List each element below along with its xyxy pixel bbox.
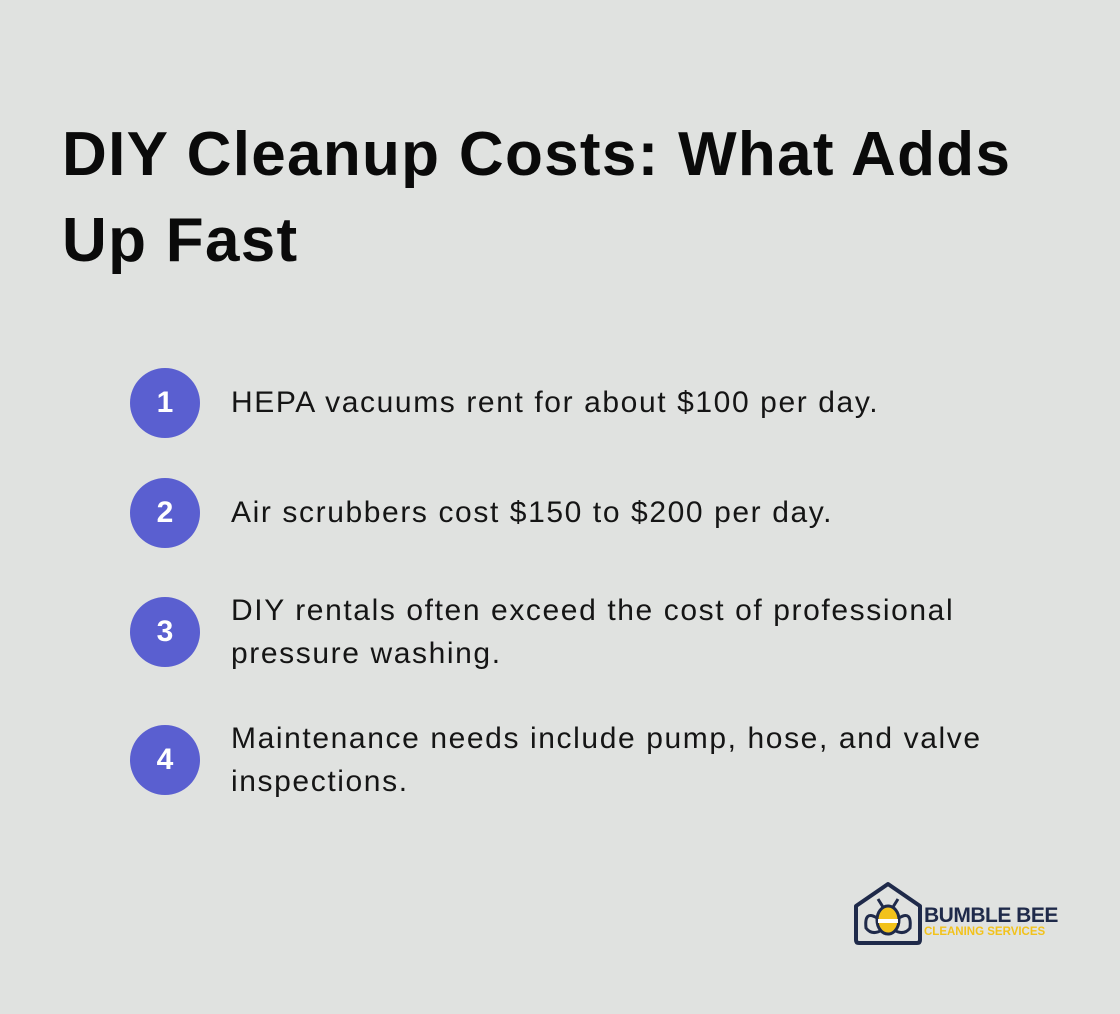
item 4 <box>130 722 982 798</box>
item 2: Air scrubbers cost $150 to $200 per day. <box>231 496 833 529</box>
title: DIY Cleanup Costs: What Adds <box>62 120 1011 189</box>
item 2 <box>130 478 833 548</box>
icon: bee house <box>854 882 922 945</box>
item 1: 1 <box>157 386 173 419</box>
title <box>62 120 1011 275</box>
title: Up Fast <box>62 206 298 275</box>
item 4: inspections. <box>231 765 409 798</box>
item 3: 3 <box>157 615 173 648</box>
item 4: Maintenance needs include pump, hose, and valve <box>231 722 982 755</box>
item 3: pressure washing. <box>231 637 502 670</box>
item 3 <box>130 594 954 670</box>
item 3: DIY rentals often exceed the cost of professional <box>231 594 954 627</box>
item 1 <box>130 368 879 438</box>
logo text: BUMBLE BEE <box>924 904 1058 927</box>
item 1: HEPA vacuums rent for about $100 per day. <box>231 386 879 419</box>
item 4: 4 <box>157 743 173 776</box>
item 2: 2 <box>157 496 173 529</box>
logo: CLEANING SERVICES <box>924 926 1045 938</box>
logo <box>854 882 1058 945</box>
